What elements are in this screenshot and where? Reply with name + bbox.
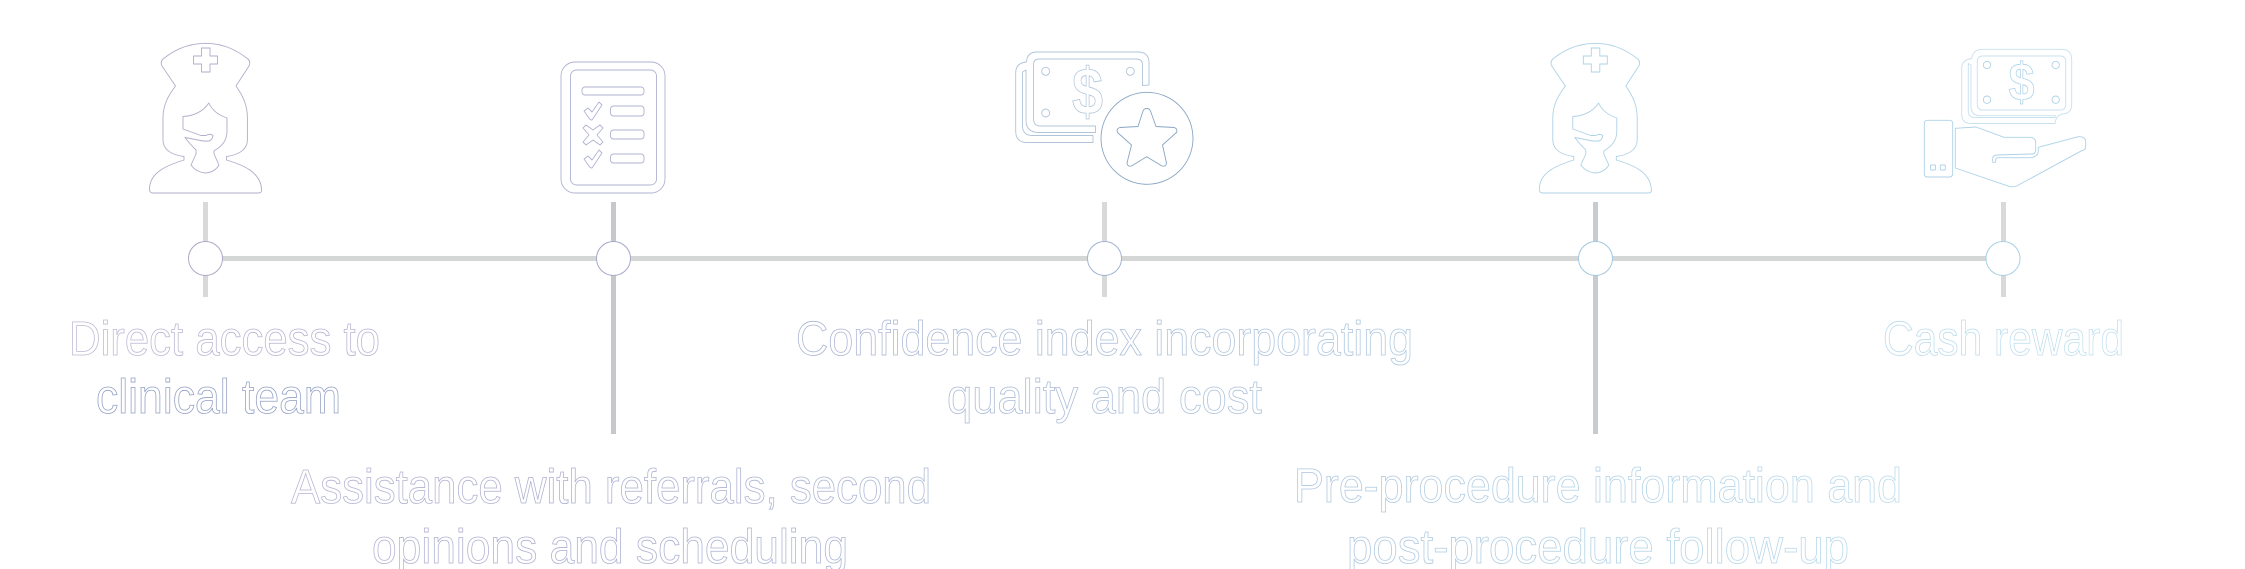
text: assistance with referrals, second opinions and scheduling (291, 461, 931, 569)
text: assistance with referrals, second opinions and scheduling: Assistance with referrals, second (291, 461, 931, 514)
text: confidence index incorporating quality and cost (796, 313, 1413, 424)
text: pre-procedure information and post-procedure follow-up (1294, 460, 1902, 569)
text: confidence index incorporating quality and cost: Confidence index incorporating (796, 313, 1413, 366)
timeline node 4 (1578, 242, 1612, 276)
timeline node 5 (1986, 242, 2020, 276)
text: cash reward: Cash reward (1883, 313, 2124, 366)
timeline node 2 (596, 242, 630, 276)
text: pre-procedure information and post-procedure follow-up: Pre-procedure information and (1294, 460, 1902, 513)
icon: money with star badge: $ (1072, 54, 1103, 128)
text: direct access to clinical team (69, 313, 380, 424)
icon: checklist clipboard (561, 62, 665, 193)
timeline node 1 (188, 242, 222, 276)
text: direct access to clinical team: clinical team (96, 371, 341, 424)
text: direct access to clinical team: Direct access to (69, 313, 380, 366)
timeline connector (203, 202, 2006, 434)
timeline node 3 (1088, 242, 1122, 276)
icon: nurse with headset (light) (1539, 43, 1651, 193)
icon: money with star badge (1016, 52, 1193, 184)
icon: hand holding cash: $ (2008, 53, 2034, 112)
icon: hand holding cash (1924, 49, 2086, 187)
text: confidence index incorporating quality and cost: quality and cost (947, 371, 1262, 424)
icon: nurse with headset (149, 43, 262, 193)
